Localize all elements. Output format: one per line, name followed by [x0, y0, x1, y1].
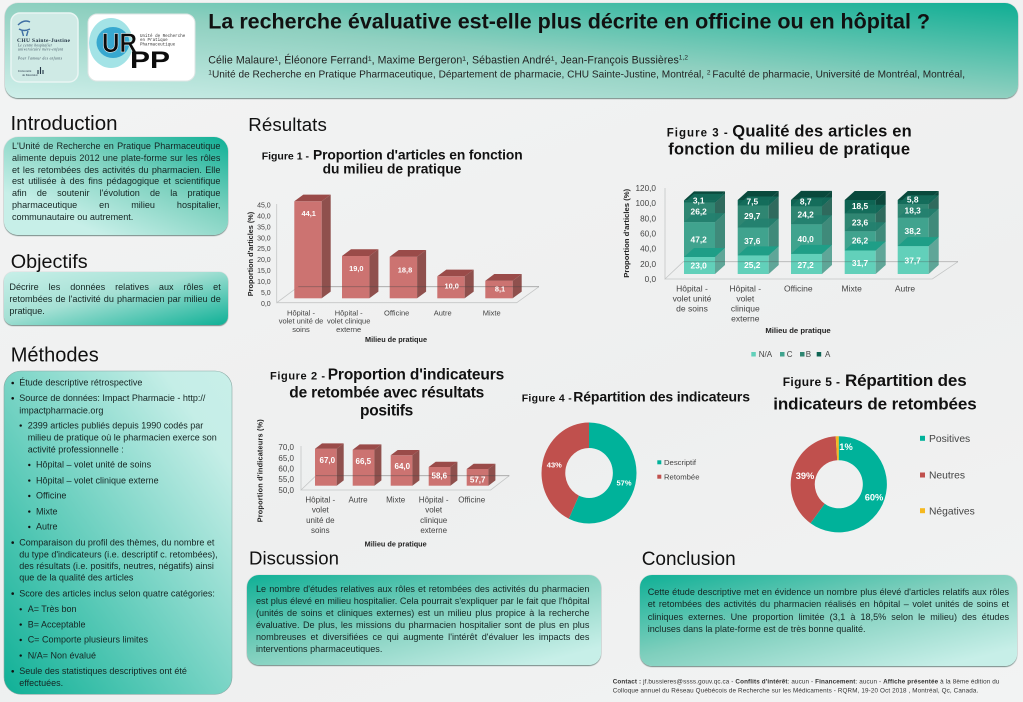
figure 3 stacked bar chart: Milieu de pratique: [765, 326, 831, 335]
stacked bar: Hôpital clinique externe: [738, 191, 779, 274]
logo: CHU Sainte-Justine: Pour l'amour des enfants: [17, 56, 63, 60]
figure 2 bar chart: Proportion d'indicateurs (%): [256, 419, 264, 522]
méthodes bullet list: N/A= Non évalué: [28, 650, 96, 660]
introduction text: afin de soutenir l'évolution de la pratique: [12, 188, 220, 198]
footer contact note: Contact : jf.bussieres@ssss.gouv.qc.ca - Conflits d'intérêt: aucun - Financement: aucun - Affiche présentée à la 8ème édition du: [613, 679, 1000, 686]
figure 3 legend: A: [825, 350, 831, 359]
figure 2 bar chart: Officine: [458, 496, 486, 505]
figure 1 title: du milieu de pratique: [323, 161, 462, 176]
header banner: [5, 2, 1018, 98]
figure 2 bar chart: volet: [312, 506, 330, 515]
figure 3 stacked bar chart: 27,2: [798, 260, 814, 270]
méthodes bullet list: Hôpital – volet clinique externe: [36, 475, 159, 485]
figure 4 legend: [657, 458, 699, 481]
bar: Hôpital unité de soins: [294, 195, 331, 298]
figure 1 bar chart: 45,0: [257, 202, 271, 210]
bar: Hôpital unité de soins: [315, 443, 344, 486]
introduction text: alimente depuis 2012 une plate-forme sur les rôles: [12, 153, 220, 163]
figure 3 stacked bar chart: 31,7: [852, 258, 868, 268]
conclusion text: cliniques externes. Une proportion limitée (3,1 à 18,5% selon le milieu) des études: [648, 612, 1009, 622]
méthodes bullet list: Autre: [36, 522, 58, 532]
discussion text: interventions pharmaceutiques.: [256, 644, 382, 654]
figure 2 bar chart: Hôpital -: [305, 496, 336, 505]
figure 2 bar chart: 65,0: [278, 454, 295, 463]
figure 1 bar chart: Autre: [434, 308, 452, 318]
figure 2 bar chart: unité de: [306, 516, 335, 525]
figure 2 bar chart: Hôpital -: [419, 496, 449, 505]
figure 3 stacked bar chart: [622, 184, 958, 359]
figure 3 stacked bar chart: 23,6: [852, 217, 868, 227]
figure 3 stacked bar chart: 37,7: [905, 256, 921, 266]
figure 5 title: Répartition des: [845, 371, 967, 390]
figure 2 bar chart: Autre: [348, 496, 368, 505]
figure 3 legend: C: [787, 350, 793, 359]
figure 3 title: Qualité des articles en: [732, 123, 912, 141]
figure 3 stacked bar chart: 0,0: [645, 275, 656, 284]
figure 3 stacked bar chart: 26,2: [852, 236, 868, 246]
figure 1 bar chart: soins: [292, 325, 310, 334]
méthodes bullet list: que de la qualité des articles: [19, 573, 134, 583]
figure 3 stacked bar chart: 40,0: [798, 234, 814, 244]
heading: objectifs: Objectifs: [11, 251, 88, 273]
figure 1 bar chart: 0,0: [261, 301, 271, 308]
figure 3 stacked bar chart: Officine: [784, 284, 813, 294]
figure 3 stacked bar chart: 3,1: [693, 195, 705, 205]
figure 3 stacked bar chart: Hôpital -: [676, 284, 708, 294]
méthodes bullet list: effectuées.: [19, 678, 63, 688]
conclusion text: [648, 587, 1009, 634]
figure 3 stacked bar chart: 120,0: [636, 184, 656, 193]
heading: résultats: Résultats: [248, 114, 327, 135]
figure 3 stacked bar chart: volet unité: [673, 294, 712, 304]
figure 1 bar chart: 25,0: [257, 246, 271, 253]
figure 2 title: positifs: [360, 403, 413, 420]
authors: Célie Malaure¹, Éléonore Ferrand¹, Maxime Bergeron¹, Sébastien André¹, Jean-François Bussières: [208, 54, 679, 66]
méthodes bullet list: impactpharmacie.org: [19, 405, 103, 415]
figure 4 legend: Descriptif: [664, 458, 697, 467]
figure 3 legend: N/A: [759, 350, 773, 359]
discussion text: [256, 584, 590, 654]
figure 4 donut chart: 43%: [547, 461, 562, 470]
figure 2 title: Proportion d'indicateurs: [328, 366, 504, 383]
affiliations: 2: [707, 69, 712, 76]
figure 1 bar chart: Milieu de pratique: [365, 335, 427, 344]
figure 1 bar chart: Proportion d'articles (%): [246, 211, 255, 296]
title: La recherche évaluative est-elle plus décrite en officine ou en hôpital ?: [208, 9, 930, 33]
figure 5 legend: Neutres: [929, 471, 965, 482]
figure 2 bar chart: clinique: [420, 516, 448, 525]
figure 1 bar chart: Hôpital -: [287, 308, 315, 318]
footer contact note: [613, 679, 1000, 695]
méthodes bullet list: milieu de pratique où le pharmacien exerce son: [28, 432, 217, 442]
figure 2 bar chart: 55,0: [278, 475, 295, 484]
figure 1 bar chart: volet clinique: [327, 316, 370, 326]
logo: CHU Sainte-Justine: CHU Sainte-Justine: [17, 38, 71, 44]
figure 1 bar chart: 20,0: [257, 257, 271, 264]
bar: Autre: [437, 270, 474, 298]
logo: URPP: Unité de Recherche: [140, 34, 186, 39]
authors: 1,2: [679, 54, 688, 61]
figure 1 bar chart: 15,0: [257, 268, 271, 275]
figure 3 stacked bar chart: 26,2: [691, 207, 707, 217]
stacked bar: Hôpital unité de soins: [684, 191, 725, 274]
méthodes bullet list: [11, 378, 218, 688]
figure 1 bar chart: Officine: [384, 308, 409, 318]
figure 3 stacked bar chart: 7,5: [746, 197, 758, 207]
figure 4 legend: Retombée: [664, 472, 699, 481]
figure 4 title: Répartition des indicateurs: [573, 389, 750, 405]
panel: discussion: [247, 575, 601, 665]
objectifs text: Décrire les données relatives aux rôles et: [9, 282, 221, 292]
figure 1 bar chart: 40,0: [257, 213, 271, 220]
figure 1 bar chart: 10,0: [257, 279, 271, 286]
panel: méthodes: [4, 371, 232, 694]
figure 3 stacked bar chart: Proportion d'articles (%): [622, 188, 631, 278]
figure 3 stacked bar chart: 40,0: [640, 245, 656, 254]
figure 1 bar chart: 5,0: [261, 290, 271, 297]
méthodes bullet list: des résultats (i.e. positifs, neutres, négatifs) ainsi: [19, 561, 214, 571]
introduction text: [12, 141, 220, 222]
méthodes bullet list: Hôpital – volet unité de soins: [36, 460, 152, 470]
logo: CHU Sainte-Justine: de Montréal: [22, 73, 38, 77]
figure 5 legend: Négatives: [929, 506, 975, 517]
figure 1 bar chart: 35,0: [257, 224, 271, 231]
figure 3 stacked bar chart: 8,7: [800, 197, 812, 207]
figure 5 legend: [920, 434, 975, 517]
figure 1 bar chart: 8,1: [495, 285, 505, 294]
objectifs text: retombées de l'activité du pharmacien par milieu de: [9, 294, 221, 304]
figure 3 stacked bar chart: 80,0: [640, 214, 656, 223]
figure 3 stacked bar chart: volet: [736, 294, 755, 304]
logo: CHU Sainte-Justine: Université: [18, 69, 32, 73]
méthodes bullet list: B= Acceptable: [28, 619, 85, 629]
figure 5 donut chart: 60%: [865, 493, 884, 503]
figure 1 bar chart: 44,1: [302, 209, 316, 218]
objectifs text: pratique.: [9, 306, 45, 316]
figure 5 donut chart: [791, 434, 975, 532]
figure 2 bar chart: 50,0: [278, 486, 295, 495]
affiliations: Unité de Recherche en Pratique Pharmaceutique, Département de pharmacie, CHU Sainte-Justine, Montréal,: [212, 69, 707, 80]
heading: introduction: Introduction: [10, 112, 118, 135]
figure 1 title: [262, 147, 523, 176]
méthodes bullet list: Officine: [36, 491, 66, 501]
bar: Mixte: [391, 450, 419, 486]
logo: URPP: [88, 14, 195, 81]
stacked bar: Autre: [898, 191, 939, 274]
logo: URPP: Pharmaceutique: [140, 42, 176, 48]
figure 3 stacked bar chart: Autre: [895, 284, 915, 294]
figure 1 bar chart: 19,0: [349, 264, 363, 273]
figure 4 donut chart: [542, 422, 699, 524]
panel: introduction: [4, 137, 228, 235]
figure 3 stacked bar chart: 25,2: [744, 260, 761, 270]
figure 3 stacked bar chart: 38,2: [905, 226, 921, 236]
conclusion text: incluses dans la plate-forme est de très bonne qualité.: [648, 624, 866, 634]
méthodes bullet list: activité professionnelle :: [28, 444, 124, 454]
discussion text: (unités de soins et cliniques externes) est un milieu plus propice à la recherche: [256, 608, 589, 618]
figure 2 bar chart: 58,6: [432, 472, 448, 481]
introduction text: pharmaceutique en milieu hospitalier,: [12, 200, 220, 210]
introduction text: est utilisée à des fins pédagogique et scientifique: [12, 176, 220, 186]
figure 3 legend: B: [806, 350, 811, 359]
méthodes bullet list: Comparaison du profil des thèmes, du nombre et: [19, 537, 215, 547]
figure 1 title: Proportion d'articles en fonction: [313, 147, 523, 162]
logo: CHU Sainte-Justine: [11, 13, 78, 82]
bar: Autre: [353, 444, 381, 486]
affiliations: Faculté de pharmacie, Université de Montréal, Montréal,: [712, 69, 965, 80]
figure 3 stacked bar chart: Mixte: [842, 284, 862, 294]
méthodes bullet list: 2399 articles publiés depuis 1990 codés par: [28, 420, 203, 430]
figure 3 title: Figure 3 -: [667, 128, 728, 140]
logo: URPP: PP: [130, 47, 170, 74]
figure 3 stacked bar chart: 23,0: [691, 261, 707, 271]
figure 5 legend: Positives: [929, 434, 970, 445]
figure 2 bar chart: externe: [420, 526, 448, 535]
bar: Officine: [467, 464, 495, 486]
logo: URPP: UR: [102, 28, 137, 58]
figure 1 bar chart: [246, 195, 539, 344]
figure 2 bar chart: 57,7: [470, 475, 486, 484]
logo: CHU Sainte-Justine: Le centre hospitalier: [17, 44, 53, 48]
figure 4 title: Figure 4 -: [522, 393, 572, 405]
figure 4 donut chart: 57%: [616, 478, 632, 487]
méthodes bullet list: Étude descriptive rétrospective: [19, 378, 142, 388]
figure 5 title: [773, 371, 977, 413]
figure 3 stacked bar chart: clinique: [731, 304, 760, 314]
figure 5 title: Figure 5 -: [783, 375, 840, 389]
méthodes bullet list: C= Comporte plusieurs limites: [28, 635, 148, 645]
introduction text: L'Unité de Recherche en Pratique Pharmaceutique: [12, 141, 220, 151]
logo: URPP: en Pratique: [140, 38, 168, 43]
méthodes bullet list: Source de données: Impact Pharmacie - http://: [19, 393, 206, 403]
figure 1 title: Figure 1 -: [262, 150, 309, 162]
stacked bar: Mixte: [845, 191, 886, 274]
figure 2 title: de retombée avec résultats: [289, 384, 484, 401]
heading: méthodes: Méthodes: [11, 345, 99, 367]
figure 1 bar chart: Mixte: [483, 308, 501, 318]
figure 3 legend: [751, 350, 831, 359]
introduction text: et les retombées des activités du pharmacien. Elle: [12, 164, 220, 174]
discussion text: est plus élevé en milieu hospitalier. Cela pourrait s'expliquer par le fait que l'hôpital: [256, 596, 589, 606]
figure 2 title: [270, 366, 504, 420]
footer contact note: Colloque annuel du Réseau Québécois de Recherche sur les Médicaments - RQRM, 19-20 Oct 2018 , Montréal, Qc, Canada.: [613, 688, 979, 695]
figure 3 stacked bar chart: 100,0: [636, 199, 656, 208]
conclusion text: Cette étude descriptive met en évidence un nombre plus élevé d'articles relatifs aux rôles: [648, 587, 1009, 597]
heading: conclusion: Conclusion: [642, 549, 736, 570]
figure 1 bar chart: Hôpital -: [335, 308, 363, 318]
panel: objectifs: [4, 272, 228, 325]
méthodes bullet list: A= Très bon: [28, 604, 76, 614]
figure 2 bar chart: 64,0: [395, 462, 411, 471]
figure 2 bar chart: 70,0: [278, 443, 295, 452]
objectifs text: [9, 282, 221, 316]
bar: Officine: [390, 250, 426, 298]
figure 3 stacked bar chart: 29,7: [744, 211, 761, 221]
figure 5 title: indicateurs de retombées: [773, 394, 977, 413]
figure 3 stacked bar chart: externe: [731, 314, 760, 324]
discussion text: nombreuses et diversifiées ce qui augmente l'intérêt d'évaluer les impacts des: [256, 632, 589, 642]
figure 1 bar chart: 18,8: [398, 266, 412, 275]
méthodes bullet list: Mixte: [36, 506, 58, 516]
panel: conclusion: [640, 575, 1017, 666]
figure 2 bar chart: 66,5: [356, 457, 372, 466]
figure 1 bar chart: externe: [336, 325, 361, 334]
figure 1 bar chart: 30,0: [257, 235, 271, 242]
figure 3 stacked bar chart: 18,3: [905, 206, 921, 216]
figure 3 stacked bar chart: 20,0: [640, 260, 656, 269]
discussion text: Le nombre d'études relatives aux rôles et retombées des activités du pharmacien: [256, 584, 589, 594]
figure 2 bar chart: [256, 419, 509, 549]
conclusion text: et retombées des activités du pharmacien réalisés en hôpital – volet unités de soins et: [648, 599, 1009, 609]
figure 2 bar chart: Mixte: [386, 496, 406, 505]
figure 3 stacked bar chart: 47,2: [691, 234, 707, 244]
logo: CHU Sainte-Justine: universitaire mère-enfant: [18, 48, 64, 52]
figure 3 stacked bar chart: 18,5: [852, 201, 868, 211]
figure 3 stacked bar chart: de soins: [676, 304, 708, 314]
heading: discussion: Discussion: [249, 547, 339, 568]
figure 1 bar chart: volet unité de: [279, 316, 323, 326]
figure 2 title: Figure 2 -: [270, 370, 325, 382]
méthodes bullet list: du type d'indicateurs (i.e. descriptif c. retombées),: [19, 549, 218, 559]
figure 2 bar chart: Milieu de pratique: [365, 540, 427, 549]
figure 3 stacked bar chart: 5,8: [907, 195, 919, 205]
stacked bar: Officine: [791, 191, 832, 274]
méthodes bullet list: Score des articles inclus selon quatre catégories:: [19, 588, 215, 598]
bar: Mixte: [485, 274, 522, 298]
figure 3 stacked bar chart: 24,2: [798, 209, 814, 219]
discussion text: évaluative. De plus, les missions du pharmacien hospitalier sont de plus en plus: [256, 620, 589, 630]
figure 3 title: fonction du milieu de pratique: [668, 140, 910, 158]
figure 3 stacked bar chart: Hôpital -: [729, 284, 761, 294]
figure 3 stacked bar chart: 60,0: [640, 230, 656, 238]
bar: Hôpital clinique externe: [429, 462, 457, 486]
affiliations: 1: [208, 69, 212, 76]
figure 3 stacked bar chart: 37,6: [744, 236, 761, 246]
figure 3 title: [667, 123, 912, 158]
introduction text: communautaire ou autrement.: [12, 212, 133, 222]
méthodes bullet list: Seule des statistiques descriptives ont été: [19, 666, 187, 676]
figure 5 donut chart: 1%: [839, 442, 853, 452]
figure 5 donut chart: 39%: [796, 471, 815, 481]
figure 1 bar chart: 10,0: [445, 282, 459, 291]
figure 2 bar chart: 60,0: [278, 464, 295, 474]
bar: Hôpital clinique externe: [342, 249, 378, 298]
figure 2 bar chart: 67,0: [320, 456, 336, 465]
figure 2 bar chart: soins: [311, 526, 330, 535]
figure 2 bar chart: volet: [425, 506, 443, 515]
